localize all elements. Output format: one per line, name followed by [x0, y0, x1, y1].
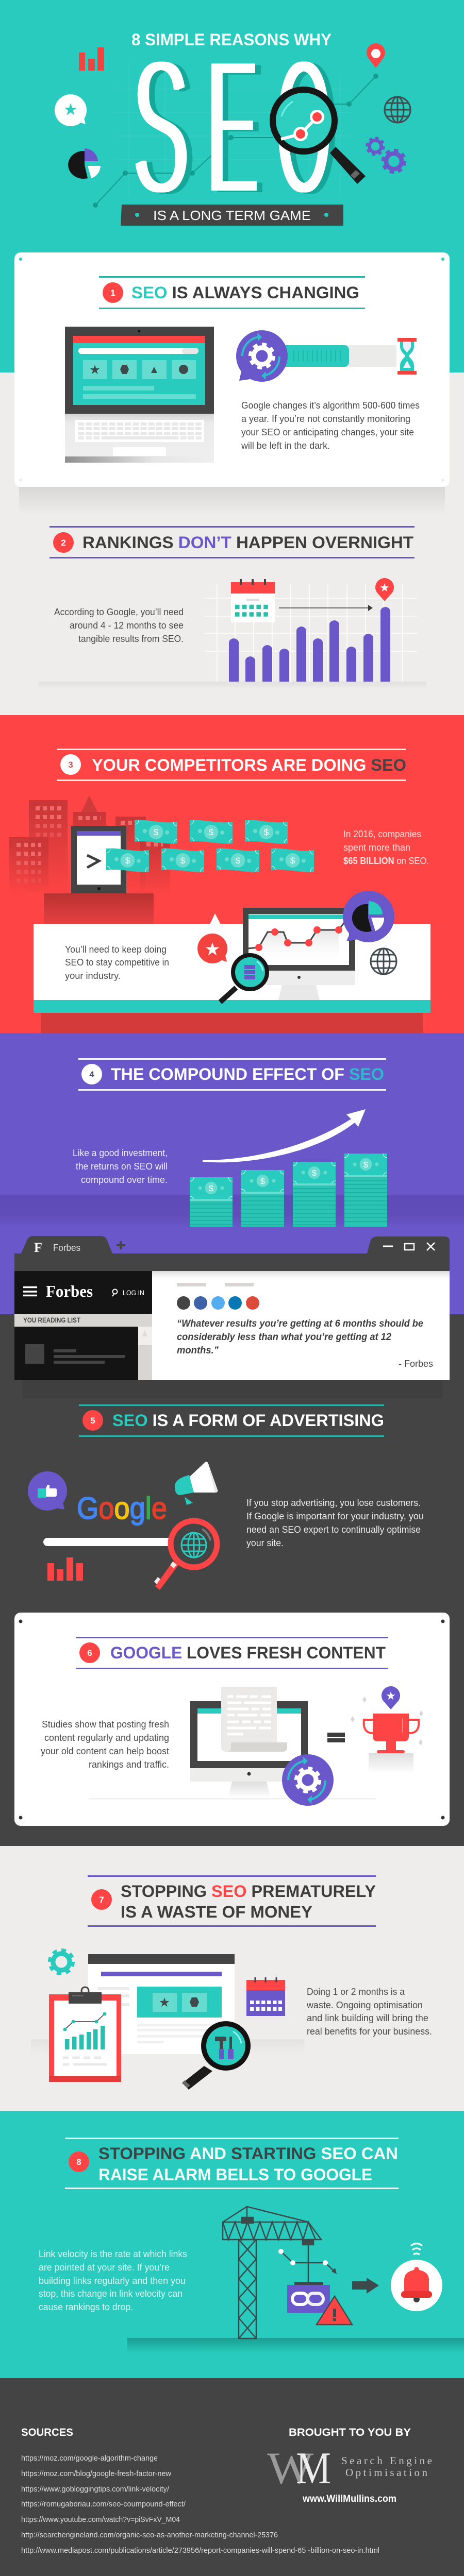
giant SEO word	[133, 20, 331, 234]
heading: section 5	[79, 1404, 384, 1437]
icon: red bars	[47, 1557, 83, 1581]
sources list: https://www.gobloggingtips.com/link-velocity/	[21, 2485, 170, 2494]
forbes sidebar	[14, 1271, 152, 1380]
link block	[287, 2282, 330, 2313]
text block: section 6: rankings and traffic.	[89, 1759, 169, 1770]
text block: section 5: need an SEO expert to continually optimise	[246, 1524, 421, 1535]
text block: keep doing seo	[65, 944, 169, 981]
text block: section 7: real benefits for your business.	[307, 2026, 432, 2037]
share buttons	[177, 1296, 259, 1310]
callout: 65 billion: $65 BILLION on SEO.	[343, 855, 429, 866]
panel: section 5 advertising	[28, 1404, 424, 1590]
search bar	[43, 1538, 170, 1546]
money bills: $	[236, 856, 241, 866]
heading: section 8	[65, 2138, 399, 2189]
white panel	[34, 891, 430, 1033]
text block: keep doing seo: You’ll need to keep doing	[65, 944, 167, 955]
sources list: https://romugaboriau.com/seo-coumpound-effect/	[21, 2500, 186, 2509]
text block: section 4: the returns on SEO will	[76, 1161, 168, 1172]
heading: section 3: 3	[68, 760, 73, 770]
icon: star speech bubble	[55, 94, 87, 126]
icon: alarm bell	[391, 2243, 442, 2311]
arrow: upward curve	[203, 1109, 366, 1162]
money bills	[106, 820, 314, 872]
money bills: $	[264, 827, 269, 837]
heading: section 2: 2	[61, 538, 66, 548]
browser window: forbes quote	[14, 1236, 450, 1398]
text block: section 5: your site.	[246, 1537, 284, 1548]
logo: WM search engine optimisation	[267, 2444, 432, 2494]
city buildings	[9, 795, 170, 894]
money bills: $	[125, 856, 130, 866]
magnifying glass	[273, 90, 366, 184]
icon: tablet	[71, 826, 126, 893]
heading: section 5: 5	[90, 1416, 95, 1426]
callout: 65 billion: spent more than	[343, 842, 410, 853]
quote text: months.”	[177, 1345, 219, 1356]
icon: purple star pin	[382, 1686, 400, 1709]
heading: section 4	[78, 1058, 386, 1091]
website url: www.WillMullins.com	[302, 2494, 396, 2504]
quote text: considerably less than what you’re getting at 12	[177, 1331, 391, 1343]
panel: section 4 compound effect	[0, 1058, 464, 1398]
forbes sidebar: Forbes	[46, 1282, 93, 1300]
money bills: $	[154, 827, 159, 837]
icon: red star bubble	[197, 934, 227, 963]
forbes sidebar: YOU READING LIST	[23, 1316, 81, 1324]
heading: section 7	[88, 1875, 376, 1927]
sources list: http://searchengineland.com/organic-seo-as-another-marketing-channel-25376	[21, 2531, 278, 2539]
equals sign	[327, 1733, 345, 1742]
sources list: http://www.mediapost.com/publications/article/273956/report-companies-will-spend-65 -billion-on-seo-in.html	[21, 2546, 379, 2555]
text block: section 8: building links regularly and then you	[39, 2275, 186, 2286]
text block: section 1: Google changes it’s algorithm 500-600 times	[241, 400, 420, 411]
text block: section 1	[241, 400, 420, 451]
sources list: https://moz.com/google-algorithm-change	[21, 2454, 158, 2463]
heading: section 3: YOUR COMPETITORS ARE DOING SEO	[92, 756, 406, 774]
text block: section 4: compound over time.	[81, 1174, 168, 1185]
text block: keep doing seo: your industry.	[65, 970, 121, 981]
panel: section 2 rankings	[39, 526, 426, 689]
icon: teal gear	[50, 1951, 73, 1973]
floor band	[0, 1195, 464, 1228]
falling line chart	[278, 2249, 337, 2274]
text block: section 8: are pointed at your site. If you’re	[39, 2262, 170, 2273]
icon: gears	[367, 138, 405, 172]
heading: section 8: RAISE ALARM BELLS TO GOOGLE	[98, 2165, 372, 2184]
forbes sidebar: LOG IN	[123, 1289, 144, 1297]
grid lines	[205, 585, 417, 682]
logo: WM search engine optimisation: M	[296, 2444, 331, 2494]
sources list	[21, 2427, 379, 2555]
text block: section 5	[246, 1497, 424, 1548]
heading: section 1: 1	[110, 288, 115, 298]
sources list: SOURCES	[21, 2427, 73, 2438]
text block: section 7: Doing 1 or 2 months is a	[307, 1986, 405, 1997]
logo: WM search engine optimisation: Optimisation	[345, 2466, 428, 2479]
floor shadow	[31, 2039, 304, 2055]
header: main title	[93, 20, 378, 234]
text block: section 5: If you stop advertising, you lose customers.	[246, 1497, 421, 1508]
text block: section 2: According to Google, you’ll need	[54, 606, 184, 617]
icon: hourglass	[397, 338, 417, 375]
icon: calendar	[231, 579, 275, 622]
heading: section 8: 8	[76, 2157, 81, 2167]
text block: section 7	[306, 1986, 432, 2037]
money bills: $	[290, 856, 295, 866]
giant SEO word: E	[207, 20, 258, 234]
giant SEO word: O	[277, 20, 331, 234]
icon: red magnifier with globe	[154, 1521, 217, 1590]
brought to you by: BROUGHT TO YOU BY	[289, 2427, 411, 2438]
laptop illustration	[65, 327, 214, 463]
heading: section 1: SEO IS ALWAYS CHANGING	[131, 283, 359, 302]
money stacks: $	[312, 1169, 317, 1178]
logo: WM search engine optimisation: Search Engine	[341, 2454, 432, 2467]
sources list: https://www.youtube.com/watch?v=piSvFxV_M04	[21, 2515, 180, 2524]
text block: section 2: tangible results from SEO.	[78, 633, 184, 644]
text block: section 1: your SEO or anticipating changes, your site	[241, 427, 414, 437]
icon: pie chart	[68, 148, 101, 179]
text block: section 6: Studies show that posting fresh	[42, 1719, 169, 1730]
ribbon: is a long term game: IS A LONG TERM GAME	[153, 208, 311, 223]
heading: section 6	[76, 1637, 388, 1669]
quote text	[177, 1318, 423, 1356]
heading: section 2	[49, 526, 415, 558]
icon: thumbs up bubble	[28, 1471, 67, 1511]
heading: section 2: RANKINGS DON’T HAPPEN OVERNIGHT	[82, 533, 413, 552]
heading: section 4: 4	[89, 1070, 94, 1079]
icon: sync gear	[282, 1754, 334, 1806]
arrow: to bell	[352, 2278, 379, 2294]
text block: section 6: your old content can help boost	[41, 1745, 169, 1756]
icon: magnifier with database	[220, 955, 267, 1002]
callout: 65 billion	[343, 828, 429, 866]
panel: section 3 competitors	[9, 749, 430, 1033]
panel: section 8 alarm bells	[39, 2138, 464, 2353]
logo: WM search engine optimisation: W	[267, 2444, 313, 2494]
heading: section 5: SEO IS A FORM OF ADVERTISING	[112, 1411, 384, 1430]
text block: section 2	[54, 606, 184, 644]
panel: footer	[21, 2427, 432, 2555]
text block: section 8: Link velocity is the rate at which links	[39, 2248, 187, 2259]
heading: section 3	[57, 749, 406, 781]
monitor and document	[89, 1687, 376, 1802]
icon: warning triangle	[317, 2296, 352, 2325]
browser tab	[21, 1236, 112, 1255]
sources list: https://moz.com/blog/google-fresh-factor-new	[21, 2469, 171, 2478]
icon: bar chart	[79, 47, 104, 71]
icon: globe	[385, 97, 410, 123]
panel: section 7 stopping prematurely	[31, 1875, 432, 2090]
text block: section 6	[41, 1719, 169, 1770]
text block: section 1: a year. If you’re not constantly monitoring	[241, 413, 410, 424]
new tab plus	[117, 1241, 125, 1249]
pedestal	[44, 893, 154, 924]
icon: map pin	[367, 43, 385, 68]
document page	[221, 1687, 287, 1752]
quote text: “Whatever results you’re getting at 6 months should be	[177, 1318, 423, 1329]
quote source: - Forbes	[399, 1359, 433, 1369]
text block: section 8: stop, this change in link velocity can	[39, 2288, 183, 2299]
google logo: Google	[77, 1491, 167, 1526]
text block: section 1: will be left in the dark.	[241, 440, 330, 451]
text block: section 8: cause rankings to drop.	[39, 2301, 133, 2312]
icon: globe	[371, 948, 396, 974]
browser tab: F	[34, 1240, 42, 1255]
text block: section 2: around 4 - 12 months to see	[70, 620, 184, 631]
arrow: calendar to peak	[279, 605, 373, 611]
callout: 65 billion: In 2016, companies	[343, 828, 421, 839]
icon: calendar	[246, 1977, 285, 2016]
text block: section 5: If Google is important for your industry, you	[246, 1511, 424, 1521]
heading: section 7: STOPPING SEO PREMATURELY	[121, 1882, 376, 1901]
browser tab: Forbes	[53, 1243, 80, 1253]
floor shadow	[127, 2338, 464, 2353]
title line: 8 simple reasons why: 8 SIMPLE REASONS WHY	[131, 30, 332, 49]
browser page illustration	[88, 1954, 235, 2054]
chart line behind letters	[93, 74, 378, 208]
money stacks: $	[363, 1161, 368, 1170]
icon: star pin	[375, 578, 394, 601]
icon: purple pie bubble	[343, 891, 394, 942]
ribbon: is a long term game	[121, 205, 343, 226]
giant SEO word: S	[133, 20, 189, 234]
heading: section 6: 6	[87, 1648, 92, 1658]
text block: section 4	[73, 1147, 168, 1185]
panel: section 6 fresh content card	[14, 1613, 450, 1826]
text block: keep doing seo: SEO to stay competitive in	[65, 957, 169, 968]
icon: sync gear bubble	[236, 330, 288, 382]
money stacks: $	[209, 1184, 213, 1193]
text block: section 7: waste. Ongoing optimisation	[306, 1999, 423, 2010]
heading: section 8: STOPPING AND STARTING SEO CAN	[98, 2144, 398, 2163]
window controls	[367, 1236, 450, 1253]
money bills: $	[209, 827, 214, 837]
text block: section 4: Like a good investment,	[73, 1147, 168, 1158]
text block: section 7: and link building will bring the	[307, 2012, 428, 2023]
heading: section 7: IS A WASTE OF MONEY	[121, 1903, 312, 1921]
heading: section 7: 7	[99, 1895, 104, 1905]
monitor with line chart	[243, 908, 355, 1000]
money bills: $	[180, 856, 186, 866]
icon: clipboard chart	[49, 1987, 121, 2082]
crane illustration	[223, 2207, 321, 2338]
money stacks	[190, 1154, 387, 1227]
panel: section 1 card	[14, 252, 450, 515]
icon: trophy	[351, 1697, 423, 1774]
bar chart	[229, 607, 390, 682]
text block: section 6: content regularly and updating	[44, 1732, 169, 1743]
heading: section 6: GOOGLE LOVES FRESH CONTENT	[110, 1643, 386, 1662]
floor shadow	[39, 682, 426, 689]
progress timer illustration	[236, 330, 417, 382]
icon: magnifier with tools	[182, 2024, 248, 2090]
money stacks: $	[260, 1177, 265, 1186]
heading: section 1	[99, 276, 365, 309]
quote panel	[152, 1271, 450, 1380]
text block: section 8	[39, 2248, 187, 2312]
heading: section 4: THE COMPOUND EFFECT OF SEO	[111, 1065, 384, 1083]
icon: megaphone	[175, 1462, 218, 1505]
